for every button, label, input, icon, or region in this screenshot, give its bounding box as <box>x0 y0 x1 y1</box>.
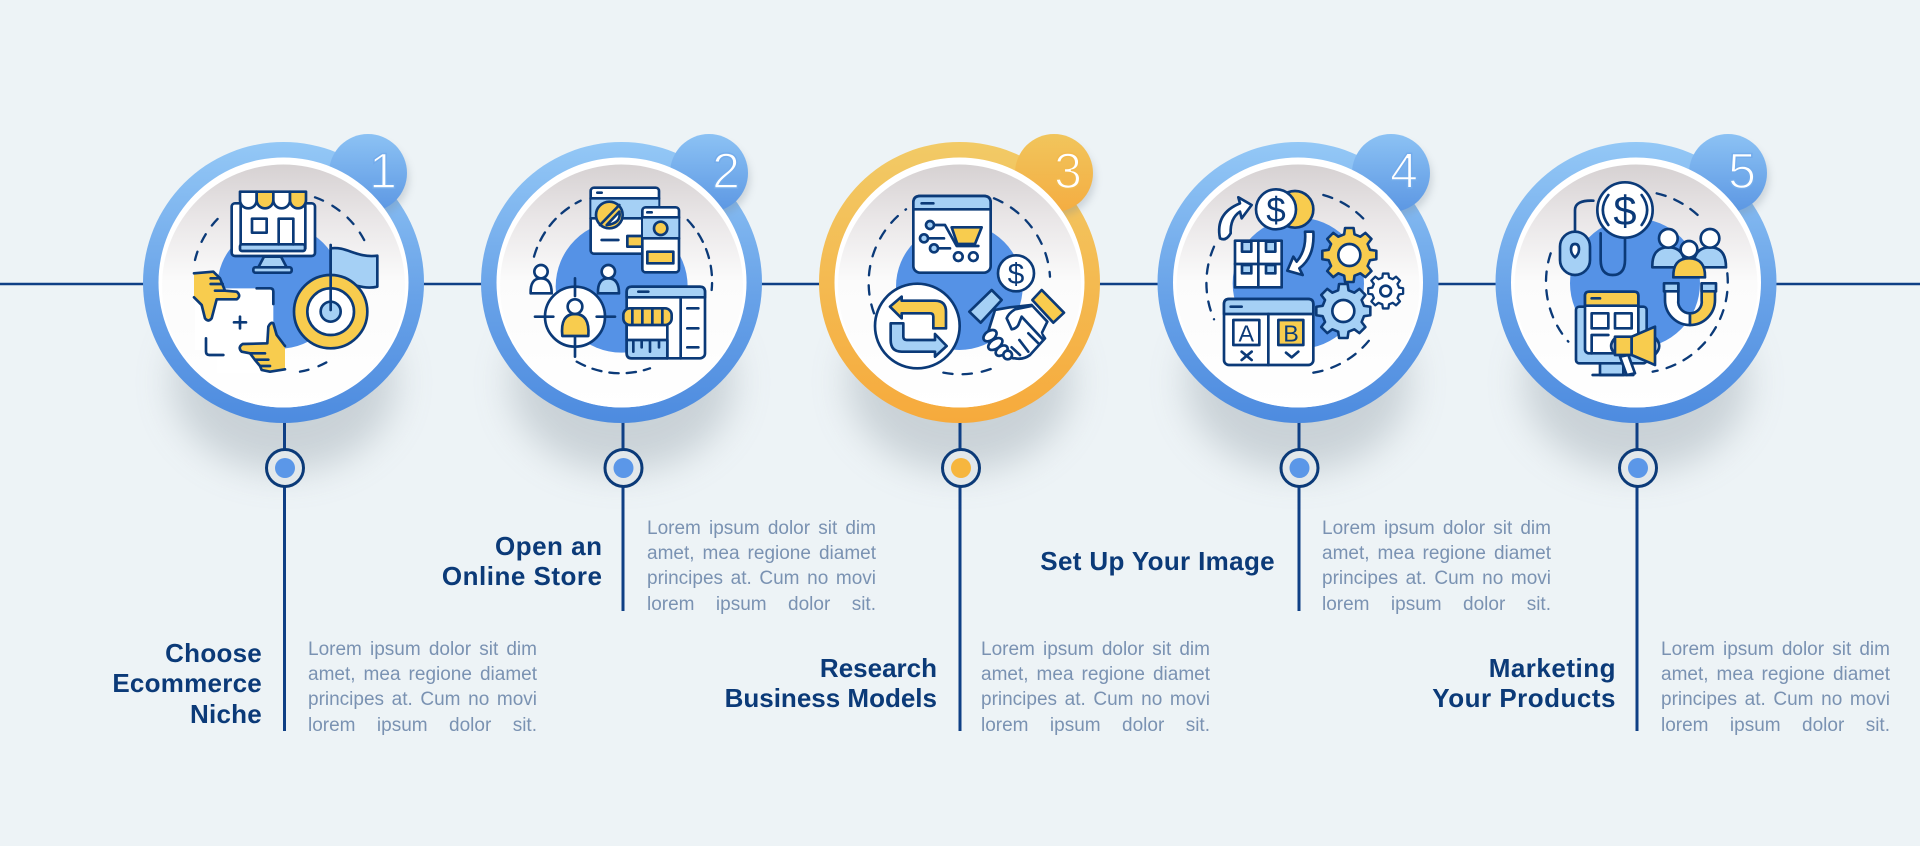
step 3 connector and node <box>848 292 1072 731</box>
step 1 connector and node <box>172 292 396 731</box>
icon: pay-per-click mouse, audience magnet and megaphone <box>1546 182 1728 375</box>
step 2 description: principes at. Cum no movi <box>647 568 876 589</box>
step 2 description: Lorem ipsum dolor sit dim <box>647 518 876 539</box>
icon: coins, boxes, A/B test and gears <box>1206 189 1403 373</box>
step 3 description <box>981 639 1210 736</box>
step 2 description: amet, mea regione diamet <box>647 543 876 564</box>
icon: coins, boxes, A/B test and gears: A <box>1239 321 1255 347</box>
step 5 description: amet, mea regione diamet <box>1661 664 1890 685</box>
step 1 circle with badge <box>143 134 424 423</box>
step 5 connector and node <box>1524 292 1748 731</box>
step 2 circle with badge <box>481 134 762 423</box>
icon: web pages, target customer and online shop <box>531 188 712 373</box>
step 2 description <box>647 518 876 615</box>
step 3 circle with badge <box>819 134 1100 423</box>
step 4 description: principes at. Cum no movi <box>1322 568 1551 589</box>
step 2 title: Open an <box>495 531 602 561</box>
step 2 connector and node <box>510 292 734 611</box>
step 5 description: Lorem ipsum dolor sit dim <box>1661 639 1890 660</box>
step 1 description <box>308 639 537 736</box>
step 3 description: lorem ipsum dolor sit. <box>981 715 1210 736</box>
icon: cart web page, exchange arrows and handshake: $ <box>1008 258 1025 291</box>
step 4 description: lorem ipsum dolor sit. <box>1322 594 1551 615</box>
step 4 description: amet, mea regione diamet <box>1322 543 1551 564</box>
step 3 description: amet, mea regione diamet <box>981 664 1210 685</box>
step 1 title: Ecommerce <box>112 668 262 698</box>
step 5 description: principes at. Cum no movi <box>1661 689 1890 710</box>
step 1 description: Lorem ipsum dolor sit dim <box>308 639 537 660</box>
step 4 circle with badge: 4 <box>1390 143 1418 199</box>
icon: coins, boxes, A/B test and gears: $ <box>1266 191 1286 230</box>
step 5 description <box>1661 639 1890 736</box>
step 5 description: lorem ipsum dolor sit. <box>1661 715 1890 736</box>
step 3 description: principes at. Cum no movi <box>981 689 1210 710</box>
step 1 title <box>112 638 262 729</box>
step 5 title: Your Products <box>1432 683 1616 713</box>
step 5 circle with badge <box>1496 134 1776 423</box>
step 2 title: Online Store <box>442 561 602 591</box>
icon: store monitor, target and framing hands <box>194 192 377 373</box>
icon: pay-per-click mouse, audience magnet and megaphone: $ <box>1613 187 1637 234</box>
step 5 circle with badge: 5 <box>1728 143 1756 199</box>
step 3 description: Lorem ipsum dolor sit dim <box>981 639 1210 660</box>
icon: cart web page, exchange arrows and handshake <box>869 196 1064 374</box>
step 2 title <box>442 531 602 591</box>
step 1 title: Choose <box>165 638 262 668</box>
step 4 title: Set Up Your Image <box>1040 546 1275 576</box>
step 1 circle with badge: 1 <box>369 143 397 199</box>
timeline horizontal line <box>0 283 1920 285</box>
step 3 title: Business Models <box>725 683 937 713</box>
step 3 title <box>725 653 937 713</box>
step 5 title <box>1432 653 1616 713</box>
step 1 description: principes at. Cum no movi <box>308 689 537 710</box>
step 2 circle with badge: 2 <box>712 143 740 199</box>
step 4 description <box>1322 518 1551 615</box>
step 2 description: lorem ipsum dolor sit. <box>647 594 876 615</box>
icon: coins, boxes, A/B test and gears: B <box>1283 321 1299 347</box>
step 1 description: lorem ipsum dolor sit. <box>308 715 537 736</box>
step 3 title: Research <box>820 653 937 683</box>
step 3 circle with badge: 3 <box>1054 143 1082 199</box>
step 1 title: Niche <box>190 699 262 729</box>
step 4 circle with badge <box>1158 134 1438 423</box>
step 4 description: Lorem ipsum dolor sit dim <box>1322 518 1551 539</box>
step 5 title: Marketing <box>1489 653 1616 683</box>
step 4 connector and node <box>1186 292 1410 611</box>
step 1 description: amet, mea regione diamet <box>308 664 537 685</box>
